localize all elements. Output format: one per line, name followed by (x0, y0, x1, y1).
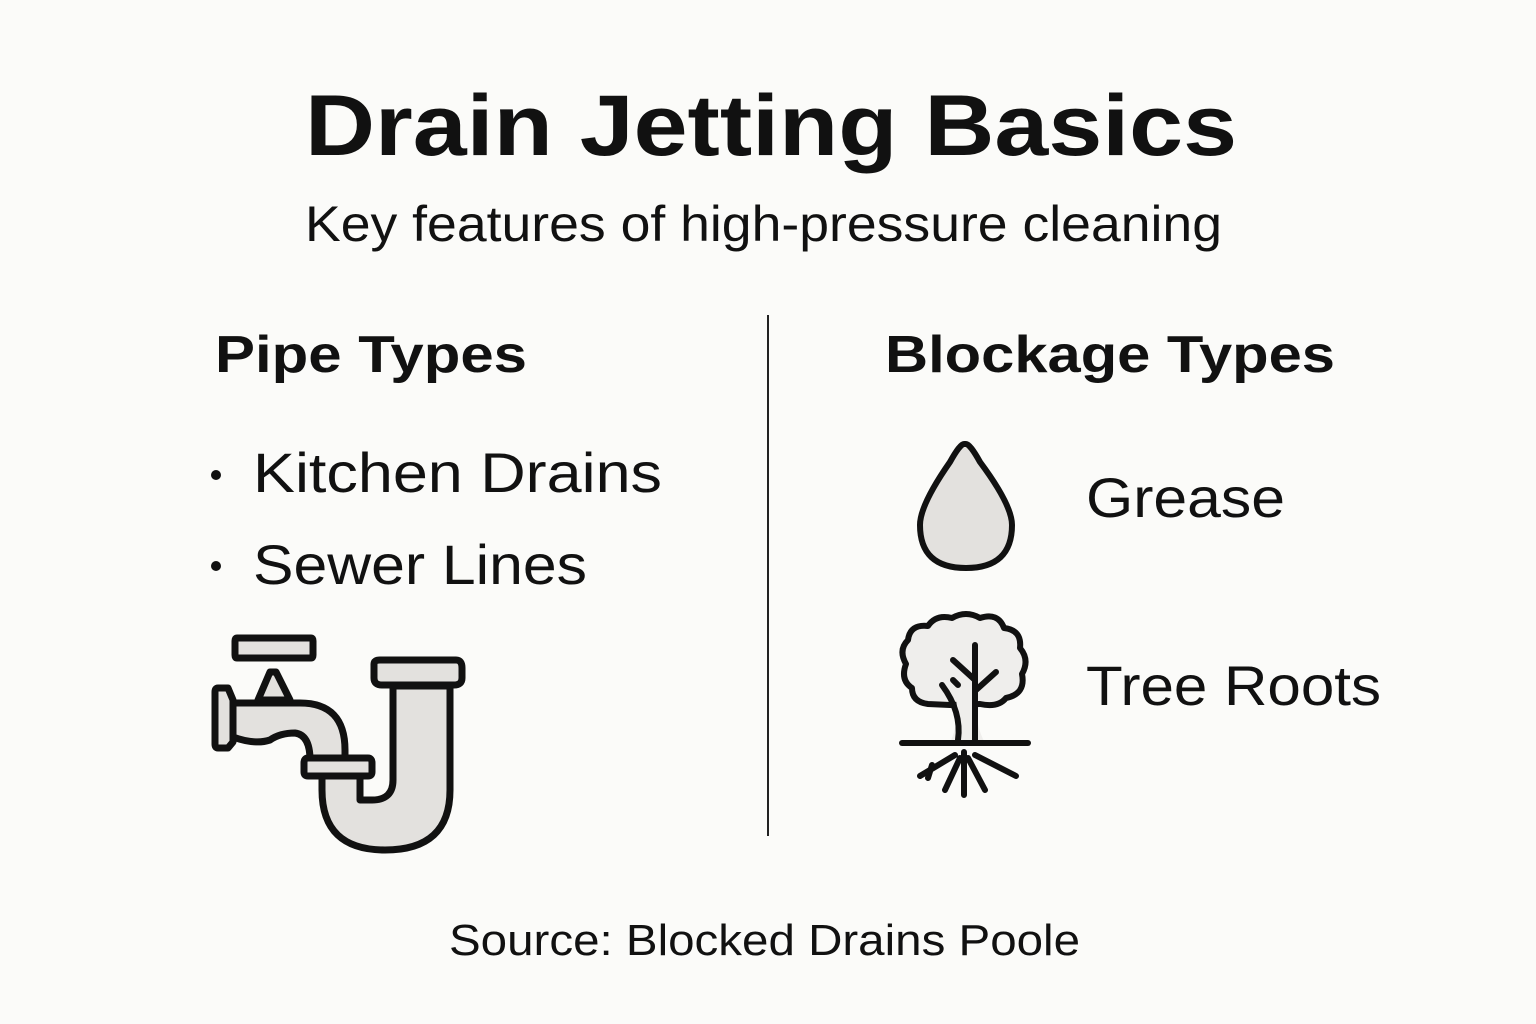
heading: blockage types: Blockage Types (885, 326, 1335, 384)
subtitle: Key features of high-pressure cleaning (305, 196, 1222, 252)
label: tree roots: Tree Roots (1086, 654, 1381, 717)
bullet: kitchen drains: Kitchen Drains (253, 441, 662, 504)
source footer: Source: Blocked Drains Poole (449, 916, 1080, 965)
panel: pipe types (211, 326, 662, 850)
label: grease: Grease (1086, 466, 1285, 529)
icon: tree roots (902, 614, 1028, 795)
panel: blockage types (885, 326, 1381, 795)
heading: pipe types: Pipe Types (215, 326, 527, 384)
icon: faucet and trap pipe (215, 638, 462, 850)
icon: grease drop (920, 444, 1012, 568)
title: Drain Jetting Basics (305, 78, 1237, 174)
bullet: sewer lines: Sewer Lines (253, 533, 587, 596)
